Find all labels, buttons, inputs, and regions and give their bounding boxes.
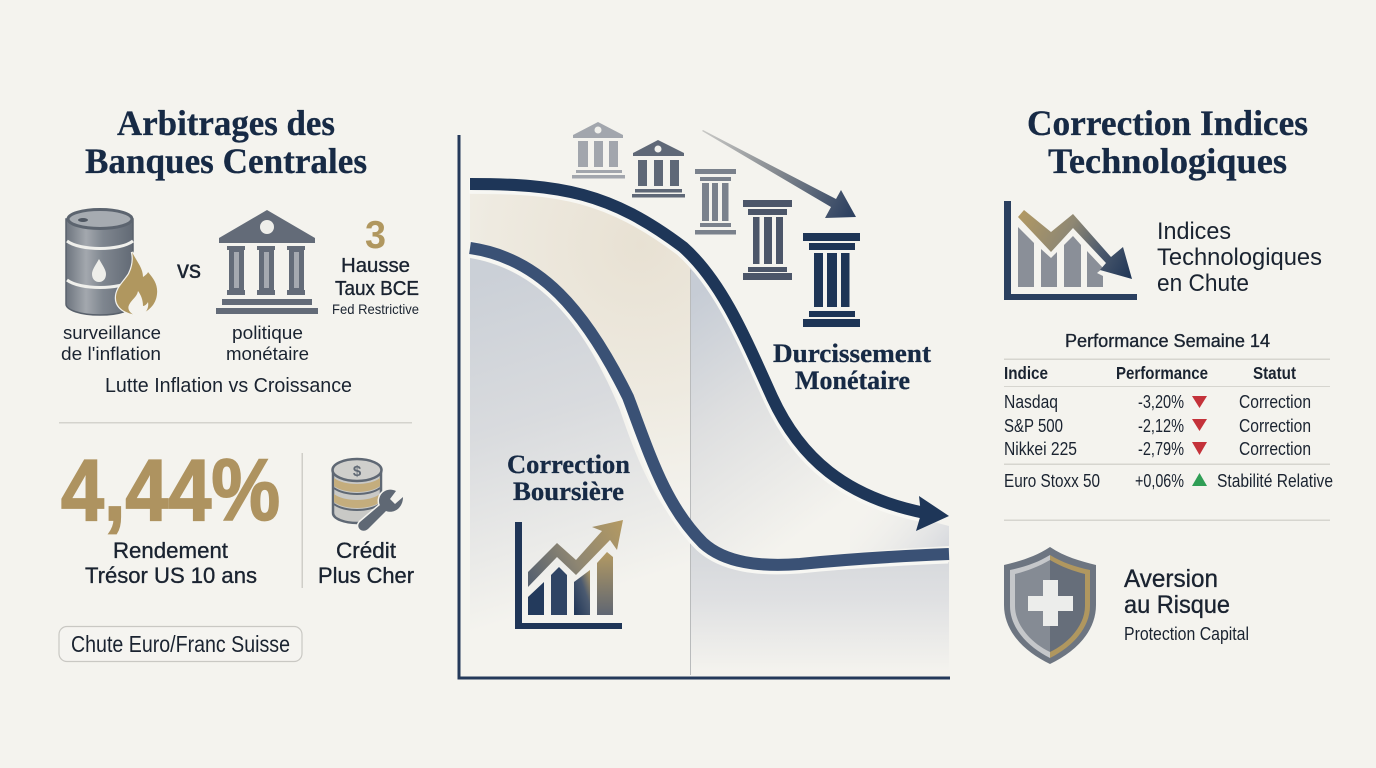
heading: left title: Banques Centrales — [85, 141, 367, 181]
area: grey under lower curve left — [470, 258, 690, 640]
column 3 — [695, 169, 736, 234]
label: indices technologiques en chute — [1157, 218, 1322, 297]
label: correction boursiere: Boursière — [513, 477, 624, 506]
temple 2 — [632, 140, 685, 198]
stat: 3 hausse taux BCE: Hausse — [341, 255, 410, 277]
label: indices technologiques en chute: en Chute — [1157, 270, 1249, 297]
label: aversion au risque: au Risque — [1124, 591, 1230, 619]
icon: central bank — [216, 210, 318, 314]
heading: right title — [1027, 103, 1308, 181]
label: indices technologiques en chute: Technologiques — [1157, 244, 1322, 271]
stat: 4,44% rendement: Trésor US 10 ans — [85, 563, 257, 588]
column 4 — [743, 200, 792, 280]
icon: rising chart — [515, 520, 623, 629]
area: grey below lower curve right — [690, 540, 949, 672]
label: vs: vs — [177, 256, 201, 284]
label: crédit plus cher: Crédit — [336, 538, 396, 563]
row: s&p 500 — [1004, 416, 1311, 436]
label: aversion au risque — [1124, 565, 1249, 644]
label: crédit plus cher — [318, 538, 414, 588]
label: aversion au risque: Aversion — [1124, 565, 1218, 593]
icon: falling chart — [1004, 201, 1137, 300]
panel: correction indices technologiques — [1004, 103, 1333, 664]
heading: right title: Technologiques — [1048, 141, 1287, 181]
heading: right title: Correction Indices — [1027, 103, 1308, 143]
row: s&p 500: -2,12% — [1138, 416, 1184, 436]
label: surveillance de l'inflation: surveillance — [63, 323, 161, 343]
curve: correction boursiere — [469, 248, 949, 567]
heading: left title: Arbitrages des — [117, 103, 335, 143]
stat: 4,44% rendement — [61, 442, 280, 588]
text: lutte inflation vs croissance: Lutte Inflation vs Croissance — [105, 375, 352, 397]
row: nasdaq — [1004, 392, 1311, 412]
stat: 3 hausse taux BCE: 3 — [365, 214, 386, 257]
row: nasdaq: -3,20% — [1138, 392, 1184, 412]
label: durcissement monetaire: Durcissement — [773, 339, 931, 368]
label: politique monétaire: politique — [232, 323, 303, 343]
column 5 — [803, 233, 860, 327]
label: surveillance de l'inflation — [61, 323, 161, 364]
row: nikkei 225: Correction — [1239, 439, 1311, 459]
area: beige band between curves — [470, 194, 690, 530]
label: indices technologiques en chute: Indices — [1157, 218, 1231, 245]
temple 1 — [572, 122, 625, 178]
label: durcissement monetaire: Monétaire — [795, 366, 910, 395]
icon: descending temples — [572, 122, 860, 327]
row: euro stoxx 50: Stabilité Relative — [1217, 471, 1333, 491]
row: s&p 500: Correction — [1239, 416, 1311, 436]
heading: left title — [85, 103, 367, 181]
table header: Statut — [1253, 363, 1296, 383]
label: crédit plus cher: Plus Cher — [318, 563, 414, 588]
row: euro stoxx 50: Euro Stoxx 50 — [1004, 471, 1100, 491]
icon: shield — [1004, 547, 1096, 664]
curve: durcissement monetaire — [469, 184, 949, 531]
label: correction boursiere: Correction — [507, 450, 631, 479]
icon: oil barrel with flame — [66, 210, 157, 315]
table title: Performance Semaine 14 — [1065, 331, 1270, 351]
row: nasdaq: Nasdaq — [1004, 392, 1058, 412]
callout: chute euro/franc suisse: Chute Euro/Franc Suisse — [71, 631, 290, 657]
table header: Indice — [1004, 363, 1048, 383]
row: nikkei 225: Nikkei 225 — [1004, 439, 1077, 459]
stat: 3 hausse taux BCE: Taux BCE — [335, 278, 419, 300]
axes — [459, 135, 950, 678]
arrow: diagonal down — [702, 130, 856, 218]
row: euro stoxx 50: +0,06% — [1135, 471, 1184, 491]
row: euro stoxx 50 — [1004, 471, 1333, 491]
label: correction boursiere — [507, 450, 631, 506]
label: politique monétaire — [226, 323, 309, 364]
area: grey under upper curve right — [690, 266, 949, 560]
stat: 4,44% rendement: 4,44% — [61, 442, 280, 539]
row: nikkei 225 — [1004, 439, 1311, 459]
table header — [1004, 363, 1296, 383]
stat: 4,44% rendement: Rendement — [113, 538, 228, 563]
table header: Performance — [1116, 363, 1208, 383]
icon: coins and wrench: $ — [353, 463, 362, 480]
panel: central chart — [459, 122, 950, 678]
row: nasdaq: Correction — [1239, 392, 1311, 412]
row: nikkei 225: -2,79% — [1138, 439, 1184, 459]
panel: arbitrages des banques centrales — [59, 103, 419, 662]
callout: chute euro/franc suisse — [59, 626, 302, 662]
label: aversion au risque: Protection Capital — [1124, 624, 1249, 644]
row: s&p 500: S&P 500 — [1004, 416, 1063, 436]
stat: 3 hausse taux BCE — [332, 214, 419, 317]
table: performance semaine 14 — [1004, 331, 1333, 491]
label: politique monétaire: monétaire — [226, 344, 309, 364]
label: durcissement monetaire — [773, 339, 931, 395]
stat: 3 hausse taux BCE: Fed Restrictive — [332, 301, 419, 317]
icon: coins and wrench — [332, 459, 403, 531]
label: surveillance de l'inflation: de l'inflation — [61, 344, 161, 364]
